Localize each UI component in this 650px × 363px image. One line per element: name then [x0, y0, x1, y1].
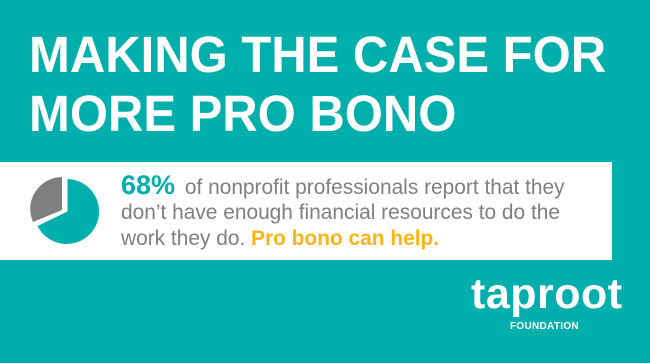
title: MAKING THE CASE FOR: [29, 27, 606, 83]
title: [29, 27, 606, 142]
statistic text: 68% of nonprofit professionals report that they: [121, 170, 565, 200]
statistic text: don’t have enough financial resources to do the: [121, 201, 560, 224]
statistic text: work they do. Pro bono can help.: [121, 227, 439, 250]
statistic text: [121, 170, 565, 250]
logo wordmark: taproot: [471, 270, 623, 318]
logo: Taproot Foundation: [471, 270, 623, 332]
logo subtitle: FOUNDATION: [510, 321, 579, 332]
pie chart: 68 percent: [30, 177, 100, 244]
panel: statistic band: [0, 162, 612, 260]
title: MORE PRO BONO: [29, 86, 456, 142]
